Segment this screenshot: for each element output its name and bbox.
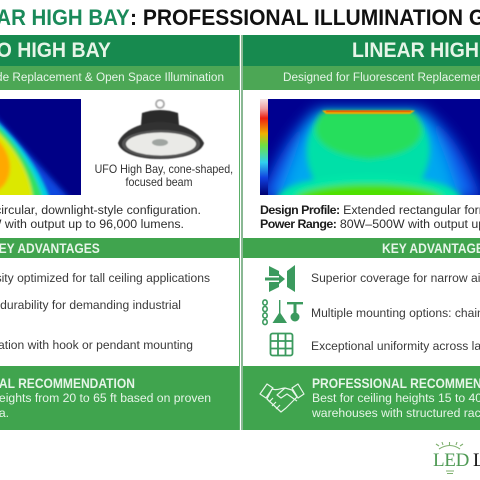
caption: UFO lamp: focused beam bbox=[125, 176, 193, 188]
caption: UFO lamp bbox=[95, 163, 233, 188]
icon: narrow aisle coverage bbox=[265, 265, 295, 292]
icon: mounting options bbox=[262, 299, 303, 326]
callout: UFO recommendation bbox=[0, 366, 239, 430]
chart: linear heat map bbox=[260, 99, 480, 195]
icon: bulb bbox=[436, 442, 464, 474]
heading: linear key advantages bbox=[243, 238, 480, 258]
heading: linear high bay bbox=[243, 35, 480, 66]
chart: UFO heat map bbox=[0, 99, 81, 195]
subheading: linear use bbox=[243, 66, 480, 90]
icon: uniform grid bbox=[270, 332, 294, 356]
panel: UFO high bay bbox=[0, 35, 240, 430]
subheading: UFO use bbox=[0, 66, 239, 90]
callout: linear recommendation bbox=[243, 366, 480, 430]
panel: linear high bay bbox=[241, 35, 480, 430]
logo: LED Lighting bbox=[433, 442, 480, 474]
icon: handshake bbox=[259, 383, 305, 413]
caption: UFO lamp: UFO High Bay, cone-shaped, bbox=[95, 163, 233, 176]
logo wordmark: LED bbox=[433, 450, 469, 471]
heading: UFO key advantages bbox=[0, 238, 239, 258]
heading: UFO high bay bbox=[0, 35, 239, 66]
icon: UFO high bay lamp bbox=[117, 99, 205, 160]
